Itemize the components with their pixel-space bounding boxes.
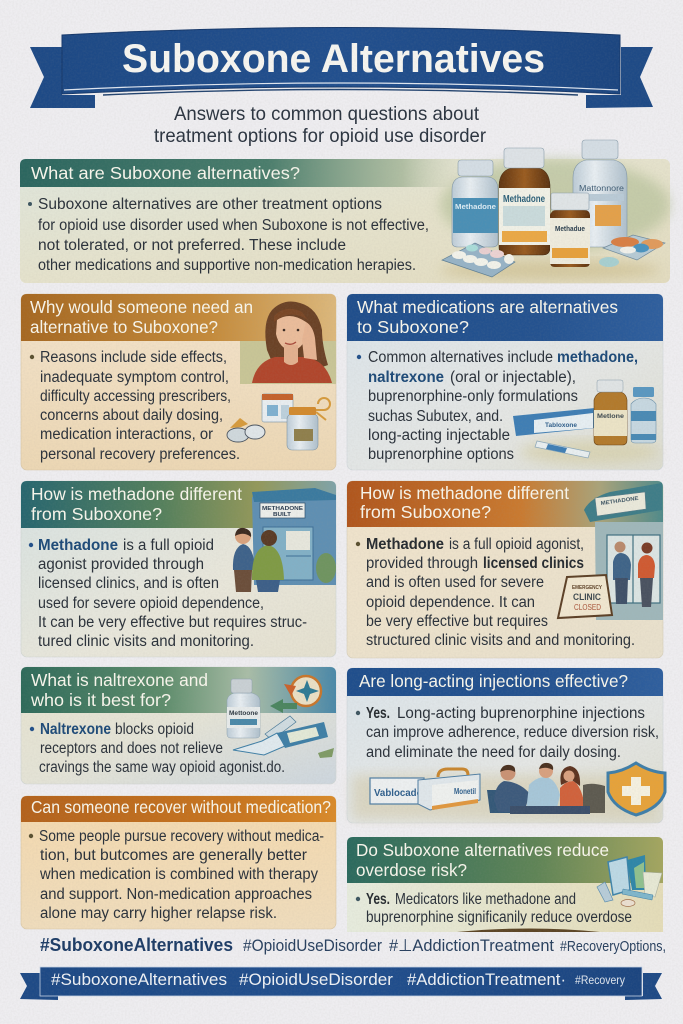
body text: methadone,	[557, 349, 638, 366]
heading: Are long-acting injections effective?	[359, 671, 628, 691]
subtitle	[154, 103, 486, 147]
panel: do alternatives reduce overdose risk	[347, 837, 663, 932]
body text: Yes.	[366, 705, 390, 722]
title banner	[30, 28, 653, 108]
body text: provided through	[366, 555, 478, 572]
body text: not tolerated, or not preferred. These include	[38, 237, 346, 254]
body text: Yes.	[366, 891, 390, 908]
body text: (oral or injectable),	[450, 369, 576, 386]
icon: clinic building and two people	[233, 488, 336, 592]
icon: naltrexone vial, receptor and injector: Mettoone	[229, 710, 258, 717]
icon: pill tray	[599, 235, 665, 267]
body text: blocks opioid	[115, 721, 194, 738]
panel: how is methadone different (left)	[21, 481, 336, 657]
banner left tail	[30, 47, 95, 108]
body text: long-acting injectable	[368, 427, 510, 444]
panel: are long-acting injections effective	[347, 668, 665, 823]
body text: buprenorphine-only formulations	[368, 388, 578, 405]
footer hashtags	[51, 970, 625, 989]
body text	[28, 196, 429, 274]
heading: to Suboxone?	[357, 317, 469, 337]
banner right tail	[586, 47, 653, 108]
icon: clinic entrance with closed sign	[558, 483, 663, 620]
icon: medicine boxes: Vablocade	[374, 787, 422, 799]
body text: other medications and supportive non-medication herapies.	[38, 257, 416, 274]
panel: how is methadone different (right)	[347, 481, 663, 658]
body text: structured clinic visits and and monitoring.	[366, 632, 635, 649]
body text	[29, 828, 324, 922]
heading	[30, 670, 208, 710]
body text: Medicators like methadone and	[395, 891, 576, 908]
title: Suboxone Alternatives	[122, 37, 545, 81]
icon: overdose medication packs	[597, 855, 662, 906]
footer hashtags: #Recovery	[575, 973, 625, 987]
body text	[357, 349, 638, 463]
body text	[29, 537, 307, 650]
footer hashtags: #OpioidUseDisorder	[239, 970, 393, 989]
panel: why would someone need an alternative	[21, 294, 336, 470]
body text: opioid dependence. It can	[366, 594, 535, 611]
body text: Long-acting buprenorphine injections	[397, 705, 645, 722]
body text: Common alternatives include	[368, 349, 553, 366]
body text: tion, but butcomes are generally better	[40, 847, 307, 864]
hashtag row: #OpioidUseDisorder	[243, 936, 382, 955]
footer hashtags: #SuboxoneAlternatives	[51, 970, 227, 989]
heading	[31, 484, 242, 524]
icon: calendar, pills and jar	[227, 394, 330, 450]
icon: medication bottles: Methadone	[455, 202, 496, 211]
sign: clinic closed: EMERGENCY	[572, 585, 603, 591]
icon: medicine boxes: Monetil	[454, 787, 476, 796]
panel: can someone recover without medication	[21, 796, 336, 929]
body text: and eliminate the need for daily dosing.	[366, 744, 621, 761]
panel: what is naltrexone	[21, 667, 336, 784]
icon: medication box, bottle and vial: Tabloxone	[545, 422, 577, 429]
sign: clinic closed	[558, 575, 612, 618]
body text: inadequate symptom control,	[40, 369, 229, 386]
body text: tured clinic visits and monitoring.	[38, 633, 254, 650]
footer right tail	[625, 973, 662, 1000]
clipped brown element at panel edge	[457, 928, 600, 932]
icon: clinic entrance with closed sign: METHADONE	[600, 496, 639, 507]
footer left tail	[20, 973, 58, 1000]
icon: naltrexone vial, receptor and injector	[227, 676, 334, 758]
heading: from Suboxone?	[31, 504, 162, 524]
body text: buprenorphine significanily reduce overdose	[366, 909, 632, 926]
heading: How is methadone different	[31, 484, 242, 504]
subtitle: Answers to common questions about	[174, 103, 480, 125]
body text: used for severe opioid dependence,	[38, 595, 264, 612]
body text	[356, 705, 659, 761]
subtitle: treatment options for opioid use disorder	[154, 125, 486, 147]
body text: be very effective but requires	[366, 613, 548, 630]
heading	[357, 297, 618, 337]
heading: Can someone recover without medication?	[31, 797, 331, 817]
icon: medication bottles: Methadone	[503, 194, 545, 205]
body text: Naltrexone	[40, 721, 111, 738]
body text: cravings the same way opioid agonist.do.	[39, 759, 285, 776]
heading: Do Suboxone alternatives reduce	[356, 840, 609, 860]
icon: woman holding her head	[240, 302, 336, 384]
heading: alternative to Suboxone?	[30, 317, 218, 337]
body text: licensed clinics, and is often	[38, 575, 219, 592]
heading: from Suboxone?	[360, 502, 491, 522]
icon: medicine boxes	[370, 769, 480, 810]
body text: and is often used for severe	[366, 574, 544, 591]
body text: buprenorphine options	[368, 446, 514, 463]
body text: It can be very effective but requires struc-	[38, 614, 307, 631]
body text: Suboxone alternatives are other treatment options	[38, 196, 382, 213]
body text: Reasons include side effects,	[40, 349, 227, 366]
heading: What medications are alternatives	[357, 297, 618, 317]
icon: counselling group	[487, 763, 605, 814]
body text: when medication is combined with therapy	[39, 866, 318, 883]
body text: Methadone	[38, 537, 118, 554]
body text	[356, 536, 635, 649]
icon: medication box, bottle and vial: Metlone	[597, 413, 624, 420]
icon: shield with cross	[608, 763, 665, 815]
heading: How is methadone different	[360, 483, 569, 503]
icon: medication bottles	[442, 140, 665, 277]
icon: medication box, bottle and vial	[513, 380, 656, 458]
icon: medication bottles: Mattonnore	[579, 184, 625, 193]
body text: Methadone	[366, 536, 444, 553]
icon: medication bottles: Methadue	[555, 224, 585, 233]
body text: and support. Non-medication approaches	[40, 886, 312, 903]
panel: what are Suboxone alternatives	[20, 140, 670, 283]
body text: Some people pursue recovery without medica-	[39, 828, 324, 845]
body text: receptors and does not relieve	[40, 740, 223, 757]
body text: medication interactions, or	[40, 426, 213, 443]
body text: can improve adherence, reduce diversion risk,	[366, 724, 659, 741]
icon: clinic building and two people: METHADONE	[262, 506, 303, 512]
banner body	[62, 28, 620, 94]
body text: is a full opioid agonist,	[449, 536, 584, 553]
body text: licensed clinics	[483, 555, 584, 572]
body text: suchas Subutex, and.	[368, 408, 503, 425]
body text: naltrexone	[368, 369, 444, 386]
heading: who is it best for?	[30, 690, 171, 710]
heading: What are Suboxone alternatives?	[31, 163, 300, 183]
sign: clinic closed: CLINIC	[573, 592, 601, 602]
panel: what medications are alternatives	[347, 294, 663, 470]
footer banner body	[40, 967, 642, 996]
body text	[356, 891, 632, 926]
icon: blister pack	[442, 243, 515, 277]
footer banner	[20, 967, 662, 1000]
body text	[30, 349, 240, 463]
hashtag row: #⊥AddictionTreatment	[389, 936, 554, 955]
heading	[30, 297, 253, 337]
hashtag row: #SuboxoneAlternatives	[40, 935, 233, 955]
body text	[30, 721, 285, 776]
footer hashtags: #AddictionTreatment·	[407, 970, 566, 989]
heading: What is naltrexone and	[31, 670, 208, 690]
body text: agonist provided through	[38, 556, 204, 573]
body text: for opioid use disorder used when Suboxone is not effective,	[38, 217, 429, 234]
body text: difficulty accessing prescribers,	[40, 388, 231, 405]
icon: clinic building and two people: BUILT	[273, 512, 291, 518]
body text: alone may carry higher relapse risk.	[40, 905, 277, 922]
heading: Why would someone need an	[30, 297, 253, 317]
body text: is a full opioid	[123, 537, 214, 554]
heading	[360, 483, 569, 522]
heading	[356, 840, 609, 880]
heading: overdose risk?	[356, 860, 467, 880]
body text: concerns about daily dosing,	[40, 407, 223, 424]
body text: personal recovery preferences.	[40, 446, 240, 463]
hashtag row	[40, 935, 666, 955]
sign: clinic closed: CLOSED	[574, 603, 601, 612]
